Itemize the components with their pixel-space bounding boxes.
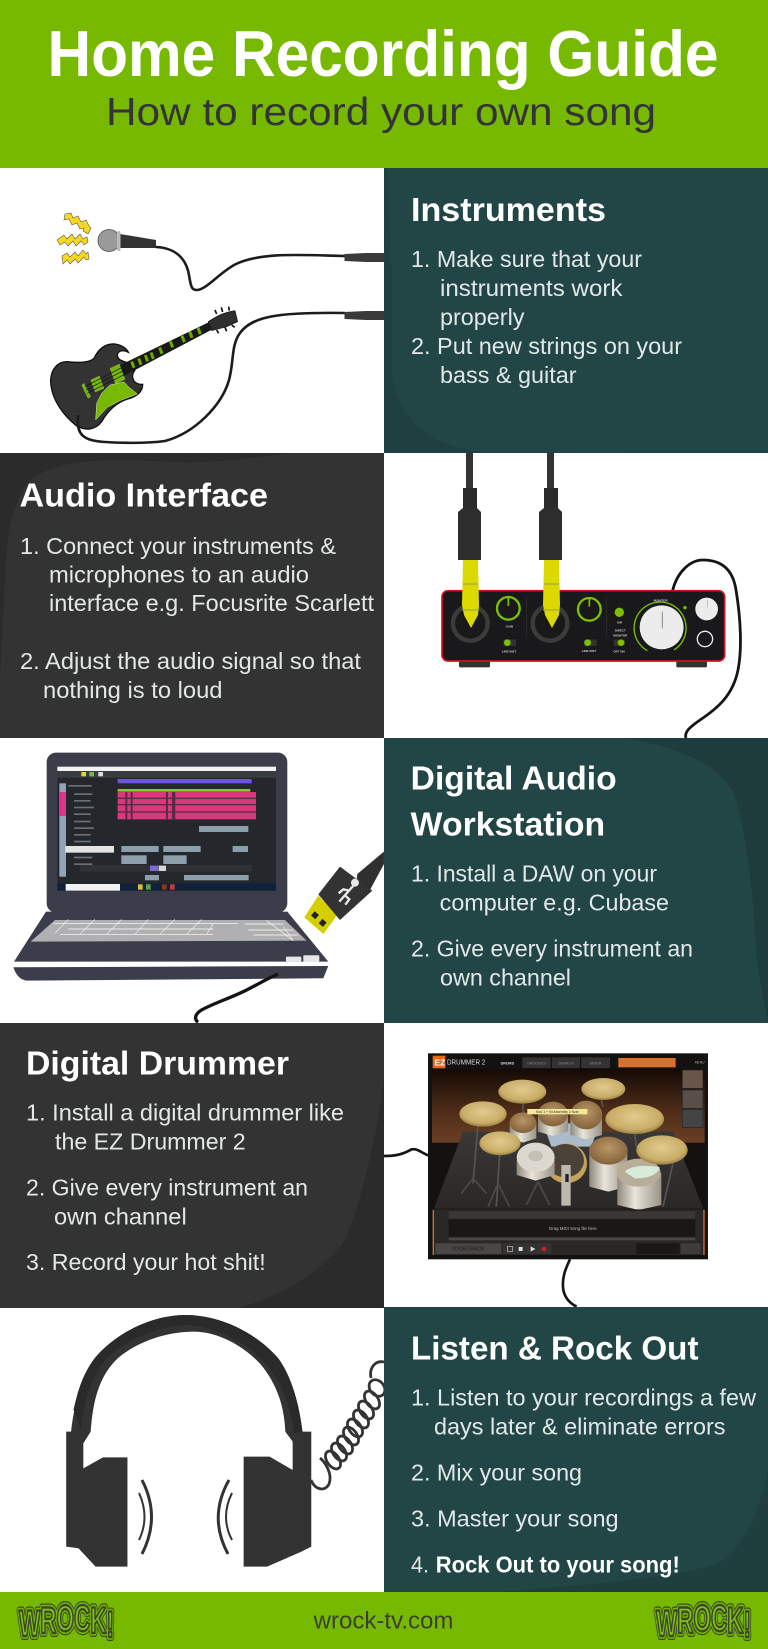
microphone cable: [156, 247, 345, 290]
icon: guitar: [51, 307, 238, 429]
footer: [0, 1592, 768, 1649]
list: bass & guitar: [440, 362, 577, 388]
subtitle: How to record your own song: [106, 91, 656, 134]
drummer cables: [384, 1149, 577, 1307]
heading: Audio Interface: [20, 478, 268, 514]
top bar: SEARCH: [558, 1061, 574, 1065]
panel: digital drummer: [0, 1023, 384, 1308]
device body: MONITOR: [613, 634, 628, 638]
footer url: wrock-tv.com: [313, 1607, 453, 1634]
logo left: WROCK!: [19, 1598, 114, 1645]
headphone coiled cable: [311, 1362, 388, 1489]
list: interface e.g. Focusrite Scarlett: [49, 590, 375, 616]
device body: OFF ON: [613, 649, 625, 653]
drum kit: [459, 1078, 688, 1210]
icon: microphone: [98, 230, 156, 252]
laptop cable: [196, 974, 278, 1022]
illustration: headphones: [66, 1315, 388, 1567]
list: computer e.g. Cubase: [440, 890, 669, 916]
top bar: GROOVES: [527, 1061, 546, 1065]
heading: Listen & Rock Out: [411, 1330, 698, 1367]
laptop trackpad buttons: [286, 955, 319, 962]
device body: DIRECT: [615, 628, 626, 632]
list: 4.: [411, 1552, 429, 1578]
heading: Digital Drummer: [26, 1046, 289, 1083]
heading: [411, 761, 617, 843]
top bar: EZ: [434, 1058, 446, 1068]
laptop front edge: [13, 966, 328, 981]
list: 3. Record your hot shit!: [26, 1249, 266, 1275]
list: instruments work: [440, 275, 623, 301]
list: 1. Connect your instruments &: [20, 533, 336, 559]
icon: USB plug: [304, 852, 384, 934]
heading: Workstation: [411, 806, 605, 843]
bottom track panel: TOONTRACK: [451, 1247, 485, 1253]
header banner: [0, 0, 768, 168]
laptop keyboard: [31, 919, 307, 942]
top bar: DRUMMER 2: [447, 1058, 485, 1067]
list: [26, 1100, 344, 1275]
list: [411, 861, 693, 991]
laptop base: [14, 912, 328, 962]
cable plugs: [344, 253, 384, 320]
logo right: WROCK!: [656, 1598, 751, 1645]
list: 1. Make sure that your: [411, 246, 642, 272]
list: properly: [440, 304, 525, 330]
panel: audio interface: [0, 453, 384, 738]
heading: Digital Audio: [411, 761, 617, 798]
list: 1. Install a DAW on your: [411, 861, 657, 887]
logo left: WROCK!: [19, 1598, 114, 1645]
laptop screen: DAW: [57, 767, 276, 891]
jack plug 2: [539, 453, 562, 628]
device body: LINE INST: [582, 649, 596, 653]
interface cable: [672, 560, 740, 738]
logo right: WROCK!: [656, 1598, 751, 1645]
illustration: laptop: [13, 753, 384, 1022]
list: 2. Give every instrument an: [411, 936, 693, 962]
list: 2. Give every instrument an: [26, 1175, 308, 1201]
heading: Instruments: [411, 192, 606, 229]
panel: listen and rock out: [384, 1307, 768, 1592]
list: 2. Adjust the audio signal so that: [20, 648, 362, 674]
icon: sound waves: [57, 213, 91, 264]
headphones shape: [66, 1315, 311, 1567]
logo right: WROCK!: [656, 1598, 751, 1645]
list: [411, 246, 682, 388]
list: Rock Out to your song!: [436, 1552, 680, 1578]
list: 3. Master your song: [411, 1506, 619, 1532]
device body: MONITOR: [654, 599, 669, 603]
list: days later & eliminate errors: [434, 1413, 726, 1439]
list: own channel: [440, 965, 571, 991]
headphone sound arcs: [139, 1480, 232, 1554]
list: 2. Put new strings on your: [411, 333, 682, 359]
top bar: DRUMS: [501, 1061, 515, 1065]
panel: digital audio workstation: [384, 738, 768, 1023]
list: [20, 533, 375, 703]
drum kit: Kick 1 + Kit Assembly 2 Note: [536, 1110, 579, 1114]
list: nothing is to loud: [43, 677, 222, 703]
title: Home Recording Guide: [48, 17, 718, 90]
device body: [442, 591, 725, 667]
guitar cable: [78, 313, 345, 443]
laptop lid: [47, 753, 287, 913]
list: the EZ Drummer 2: [55, 1129, 246, 1155]
list: own channel: [54, 1203, 187, 1229]
device body: AIR: [617, 620, 623, 624]
device body: GAIN: [506, 625, 513, 629]
bottom track panel: [433, 1209, 705, 1255]
panel: instruments: [384, 168, 768, 453]
jack plug 1: [458, 453, 481, 628]
list: microphones to an audio: [49, 562, 309, 588]
top bar: MIXER: [590, 1061, 602, 1065]
logo left: WROCK!: [19, 1598, 114, 1645]
side thumbnails: [682, 1070, 703, 1128]
list: [411, 1385, 756, 1578]
top bar: MENU: [695, 1060, 705, 1064]
list: 1. Listen to your recordings a few: [411, 1385, 756, 1411]
device body: LINE INST: [502, 650, 516, 654]
panel: instruments illustration: [51, 213, 384, 443]
illustration: EZ Drummer window: [384, 1053, 708, 1307]
list: 2. Mix your song: [411, 1460, 582, 1486]
top bar: [433, 1056, 705, 1068]
illustration: focusrite audio interface: [442, 453, 740, 738]
bottom track panel: Drag MIDI Song file here: [549, 1226, 597, 1231]
list: 1. Install a digital drummer like: [26, 1100, 344, 1126]
